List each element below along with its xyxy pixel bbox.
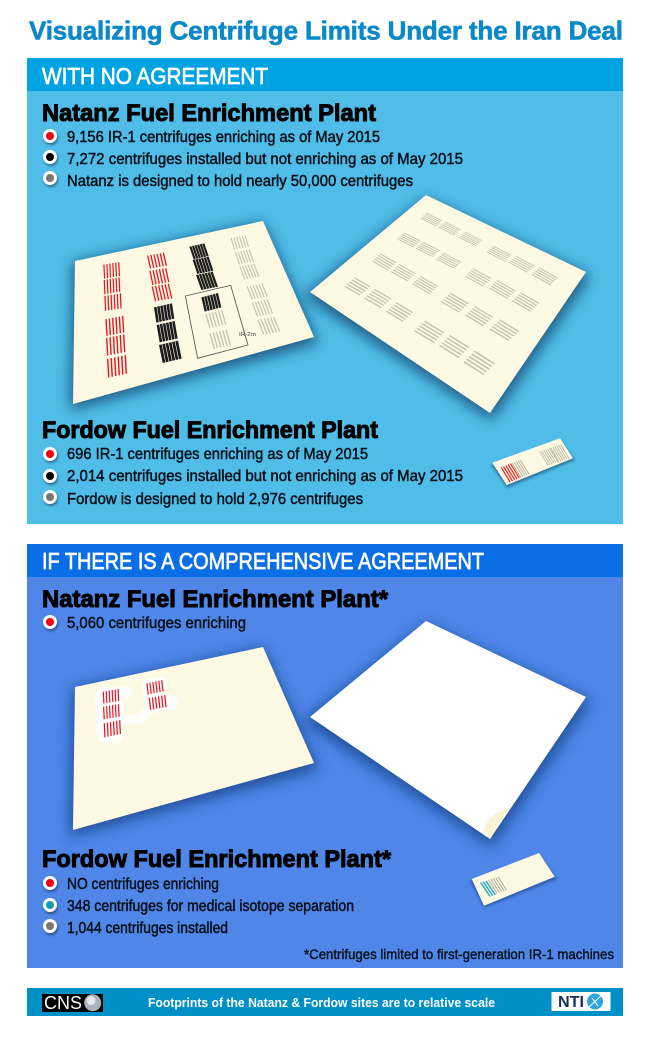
panel header: comprehensive agreement bbox=[27, 544, 623, 577]
legend: Fordow current status: 696 IR-1 centrifuges enriching as of May 2015 bbox=[67, 446, 368, 463]
heading: Fordow: Fordow Fuel Enrichment Plant bbox=[42, 417, 378, 444]
legend: Fordow current status: 2,014 centrifuges installed but not enriching as of May 2015 bbox=[67, 468, 463, 485]
heading: Natanz: Natanz Fuel Enrichment Plant bbox=[42, 100, 376, 127]
diagram: Natanz left hall with centrifuges: IR-2m bbox=[239, 332, 257, 338]
legend: Natanz current status: 7,272 centrifuges installed but not enriching as of May 2015 bbox=[67, 151, 463, 168]
panel header: comprehensive agreement: IF THERE IS A COMPREHENSIVE AGREEMENT bbox=[42, 548, 484, 574]
diagram: Fordow hall current bbox=[491, 438, 575, 488]
heading: Natanz under agreement: Natanz Fuel Enrichment Plant* bbox=[42, 586, 389, 613]
heading: Fordow under agreement: Fordow Fuel Enrichment Plant* bbox=[42, 846, 392, 873]
legend: Fordow under agreement: 1,044 centrifuges installed bbox=[67, 920, 228, 937]
legend: Fordow current status: Fordow is designed to hold 2,976 centrifuges bbox=[67, 491, 363, 508]
footnote: *Centrifuges limited to first-generation IR-1 machines bbox=[304, 946, 614, 962]
logo: CNS: CNS bbox=[44, 993, 82, 1013]
legend: Natanz current status: Natanz is designed to hold nearly 50,000 centrifuges bbox=[67, 173, 413, 190]
diagram: Natanz left hall under agreement bbox=[70, 647, 318, 836]
diagram: Natanz right hall emptied bbox=[304, 621, 590, 846]
panel header: with no agreement bbox=[27, 58, 623, 91]
diagram: Natanz left hall with centrifuges bbox=[70, 221, 318, 410]
panel: with comprehensive agreement bbox=[27, 544, 623, 968]
legend: Fordow under agreement: 348 centrifuges for medical isotope separation bbox=[67, 898, 354, 915]
logo: NTI bbox=[552, 992, 610, 1011]
legend: Fordow current status bbox=[43, 446, 463, 508]
logo: CNS bbox=[42, 993, 103, 1013]
diagram: Fordow hall under agreement bbox=[470, 853, 557, 908]
footer note: Footprints of the Natanz & Fordow sites are to relative scale bbox=[148, 995, 495, 1010]
legend: Natanz current status bbox=[43, 129, 463, 190]
logo: NTI: NTI bbox=[558, 994, 584, 1011]
footer bar bbox=[27, 988, 623, 1016]
legend: Fordow under agreement bbox=[43, 876, 354, 937]
diagram: Natanz right hall with empty positions bbox=[304, 195, 590, 420]
panel header: with no agreement: WITH NO AGREEMENT bbox=[42, 63, 268, 89]
panel: with no agreement bbox=[27, 58, 623, 524]
legend: Natanz current status: 9,156 IR-1 centrifuges enriching as of May 2015 bbox=[67, 129, 380, 146]
title: Visualizing Centrifuge Limits Under the Iran Deal bbox=[29, 16, 623, 46]
legend: Fordow under agreement: NO centrifuges enriching bbox=[67, 876, 219, 893]
legend: Natanz under agreement: 5,060 centrifuges enriching bbox=[67, 615, 246, 632]
